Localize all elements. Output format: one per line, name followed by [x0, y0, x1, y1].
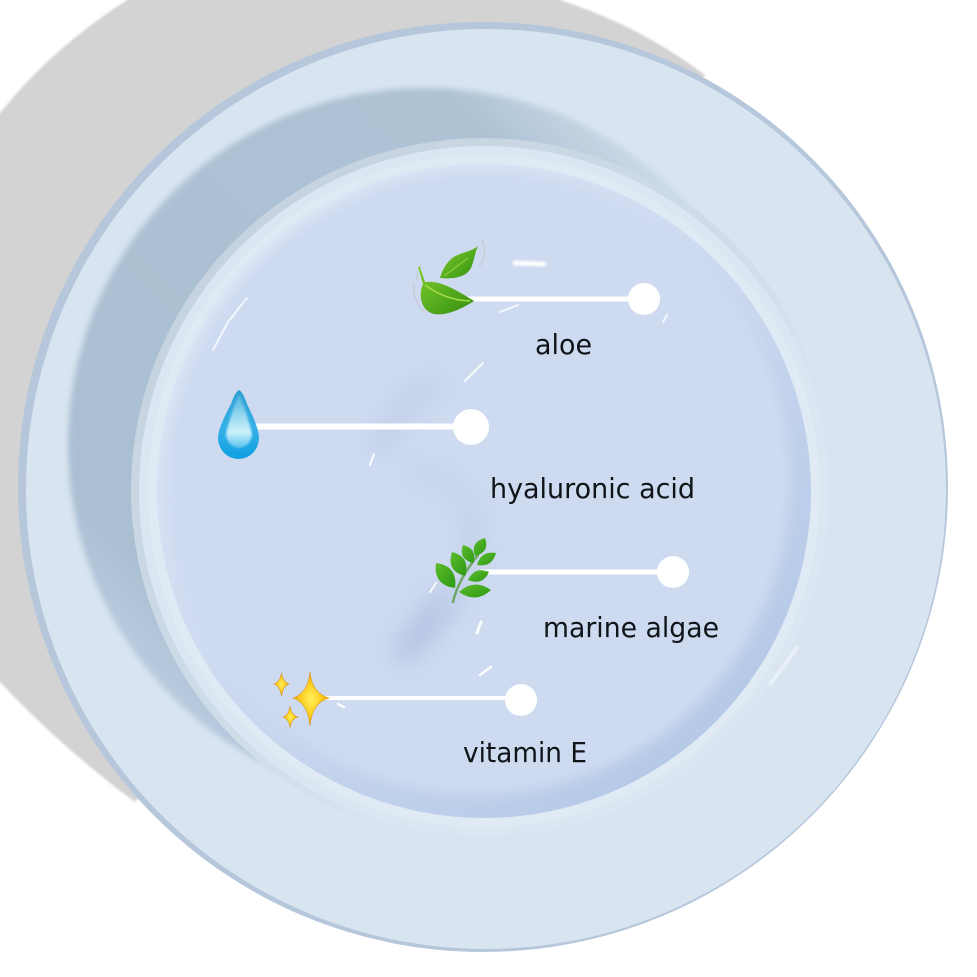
icon: water drop	[218, 390, 259, 459]
cream highlights	[213, 263, 797, 707]
jar well	[157, 164, 811, 818]
icon: sparkles	[274, 672, 329, 728]
jar outer lip	[131, 138, 835, 842]
label: vitamin E: vitamin E	[463, 736, 587, 769]
vitamin E connector line and dot	[324, 684, 537, 716]
cream swirl	[380, 385, 475, 650]
hyaluronic acid connector line and dot	[256, 409, 489, 445]
cast shadow behind dish	[0, 0, 705, 802]
label: aloe: aloe	[535, 328, 592, 361]
label: marine algae: marine algae	[543, 611, 719, 644]
icon: leaves	[414, 240, 485, 314]
icon: sprig	[436, 538, 496, 602]
cream surface	[166, 171, 790, 795]
callout: vitamin E	[274, 672, 587, 769]
shadow on dish from jar	[68, 88, 782, 802]
callout: aloe	[414, 240, 660, 361]
callout: marine algae	[436, 538, 719, 644]
label: hyaluronic acid: hyaluronic acid	[490, 472, 695, 505]
jar inner ring	[139, 146, 829, 836]
aloe connector line and dot	[468, 283, 660, 315]
callout: hyaluronic acid	[218, 390, 695, 505]
marine algae connector line and dot	[480, 556, 689, 588]
jar	[131, 138, 835, 842]
